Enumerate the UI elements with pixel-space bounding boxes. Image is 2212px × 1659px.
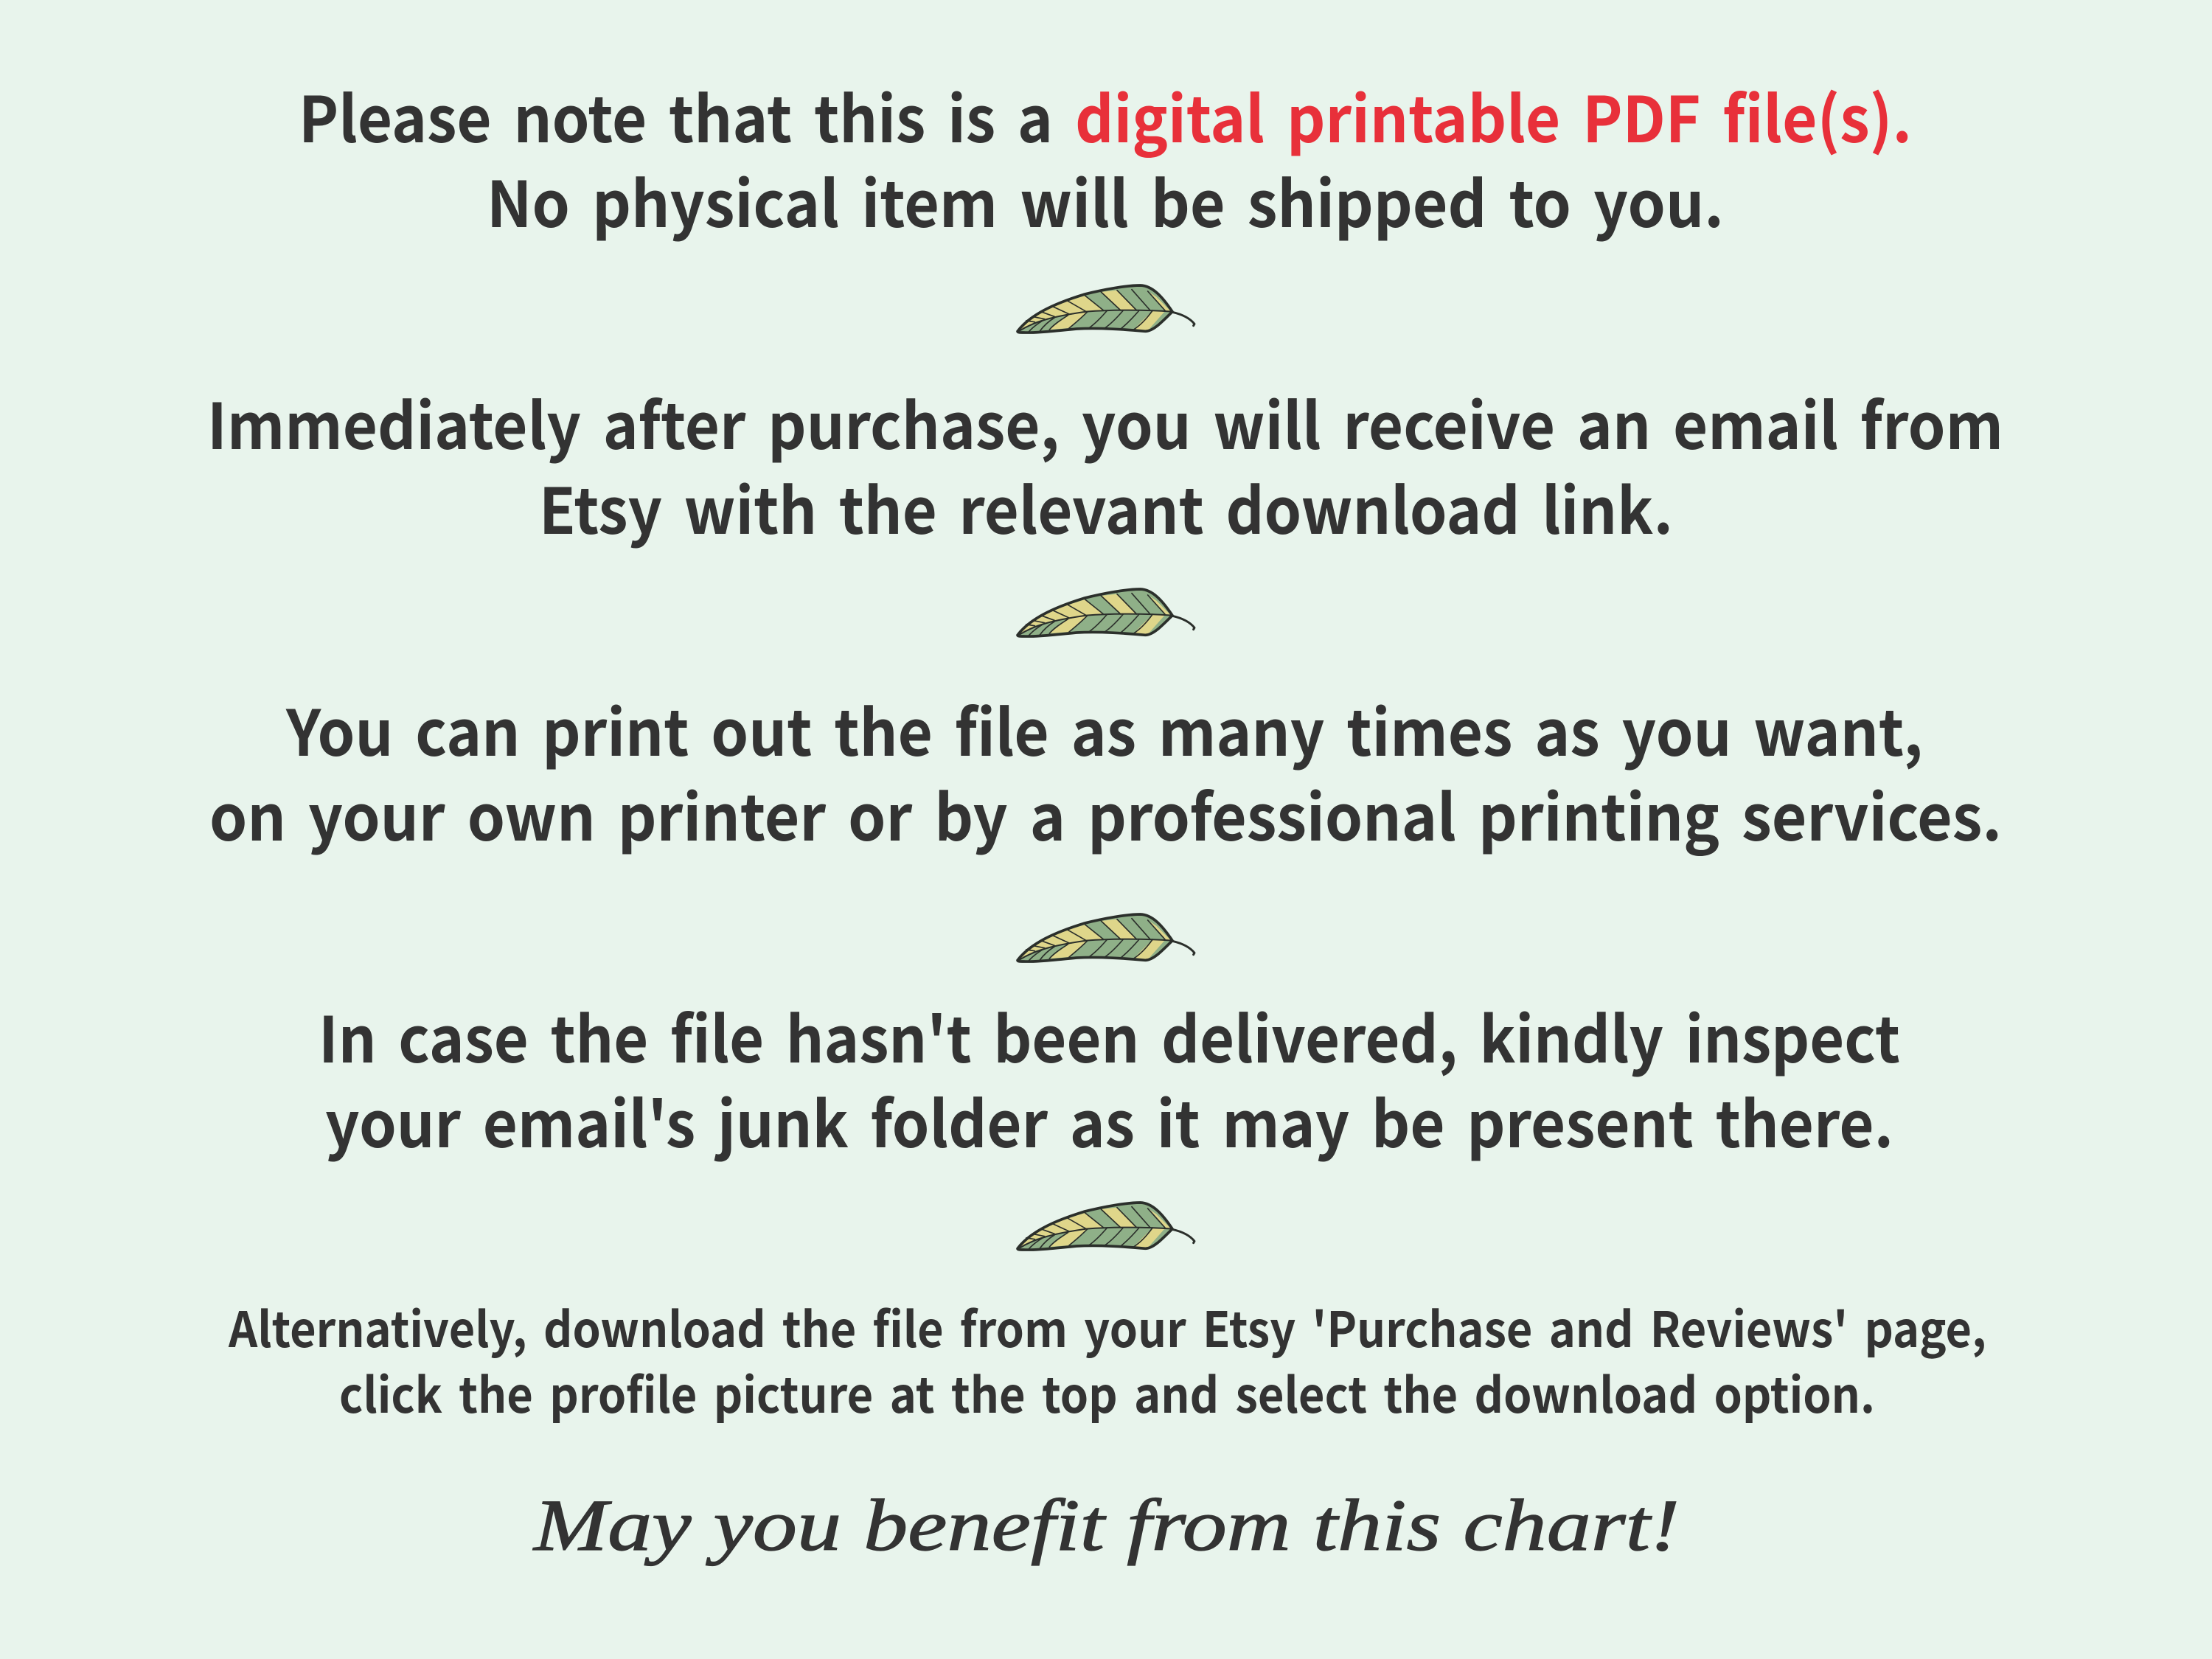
text block: alternative download: click the profile picture at the top and select the download option. — [339, 1357, 1875, 1427]
icon: leaf divider 1 — [1018, 285, 1194, 333]
text block: printing: You can print out the file as many times as you want, — [285, 682, 1923, 774]
text block: email download link — [207, 375, 2003, 552]
icon: leaf divider 4 — [1018, 1203, 1194, 1250]
text block: alternative download: Alternatively, download the file from your Etsy 'Purchase and Reviews' page, — [228, 1291, 1986, 1362]
text block: printing: on your own printer or by a professional printing services. — [209, 767, 2002, 859]
text block: junk folder: In case the file hasn't been delivered, kindly inspect — [319, 989, 1900, 1081]
text block: email download link: Immediately after purchase, you will receive an email from — [207, 375, 2003, 467]
text block: digital file notice: No physical item will be shipped to you. — [487, 153, 1724, 246]
text block: junk folder — [319, 989, 1900, 1166]
text block: digital file notice: Please note that this is a — [299, 69, 1053, 161]
icon: leaf divider 3 — [1018, 914, 1194, 961]
text block: junk folder: your email's junk folder as it may be present there. — [325, 1074, 1893, 1166]
text block: digital file notice — [299, 69, 1912, 246]
icon: leaf divider 2 — [1018, 589, 1194, 636]
text block: alternative download — [228, 1291, 1986, 1427]
text block: printing — [209, 682, 2002, 859]
text block: email download link: Etsy with the relevant download link. — [539, 460, 1673, 552]
closing message: May you benefit from this chart! — [532, 1484, 1680, 1566]
text block: digital file notice: digital printable PDF file(s). — [1075, 69, 1912, 161]
